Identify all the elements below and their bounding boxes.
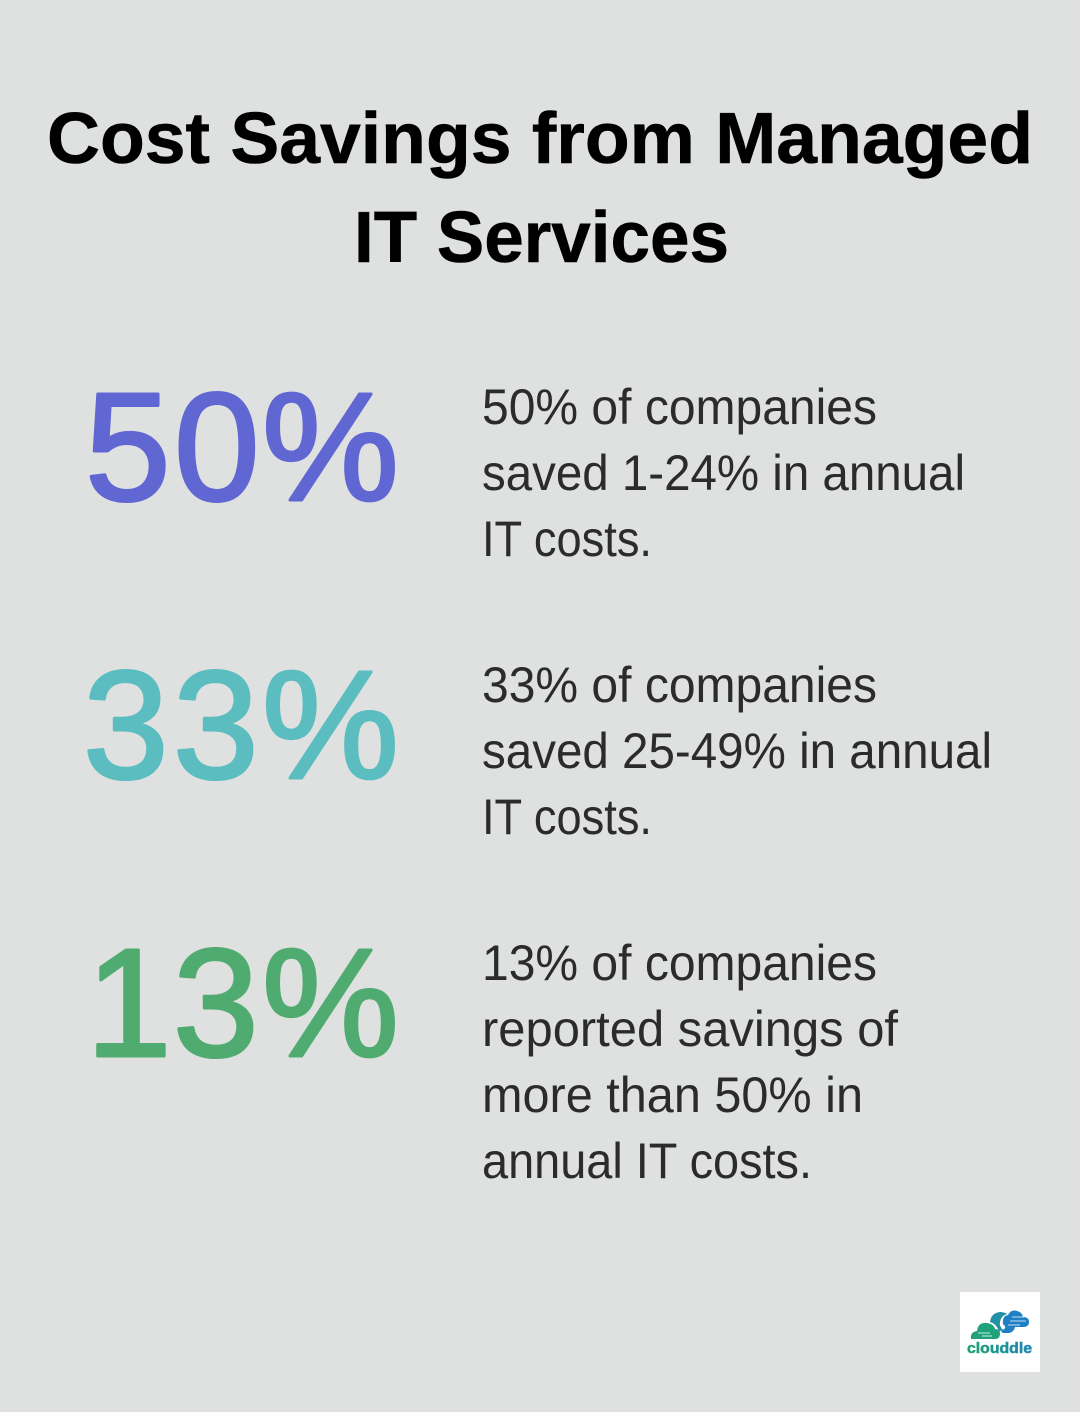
statistic: 13% [86,917,898,1189]
description: 13% of companies: more than 50% in [482,1067,863,1123]
title: IT Services [354,198,729,278]
big number: 13%: 1 [86,917,172,1089]
big number: 33%: 3 [173,639,259,811]
statistic: 50% [85,361,965,567]
title: Cost Savings from Managed [47,99,1033,179]
big number: 33%: 3 [83,639,169,811]
description: 33% of companies [482,657,992,845]
logo wordmark: clouddle [967,1340,1032,1357]
description: 50% of companies: saved 1-24% in annual [482,445,965,501]
description: 33% of companies: IT costs. [482,789,652,845]
description: 50% of companies [482,379,965,567]
description: 50% of companies: 50% of companies [482,379,877,435]
description: 13% of companies: annual IT costs. [482,1133,812,1189]
description: 50% of companies: IT costs. [482,511,652,567]
description: 33% of companies: saved 25-49% in annual [482,723,992,779]
description: 33% of companies: 33% of companies [482,657,877,713]
description: 13% of companies: 13% of companies [482,935,877,991]
icon: right cloud [1001,1310,1029,1333]
big number: 50%: 0 [174,361,260,533]
big number: 50%: % [262,361,399,533]
big number: 13%: % [262,917,399,1089]
icon: middle cloud [990,1312,1007,1332]
description: 13% of companies [482,935,898,1189]
big number: 50%: 5 [85,361,171,533]
title [47,99,1033,278]
description: 13% of companies: reported savings of [482,1001,898,1057]
big number: 33%: % [262,639,399,811]
icon: left cloud [971,1323,1000,1339]
cloud circuit lines [978,1317,1026,1336]
logo: clouddle [960,1292,1040,1372]
big number: 13%: 3 [173,917,259,1089]
statistic: 33% [83,639,992,845]
